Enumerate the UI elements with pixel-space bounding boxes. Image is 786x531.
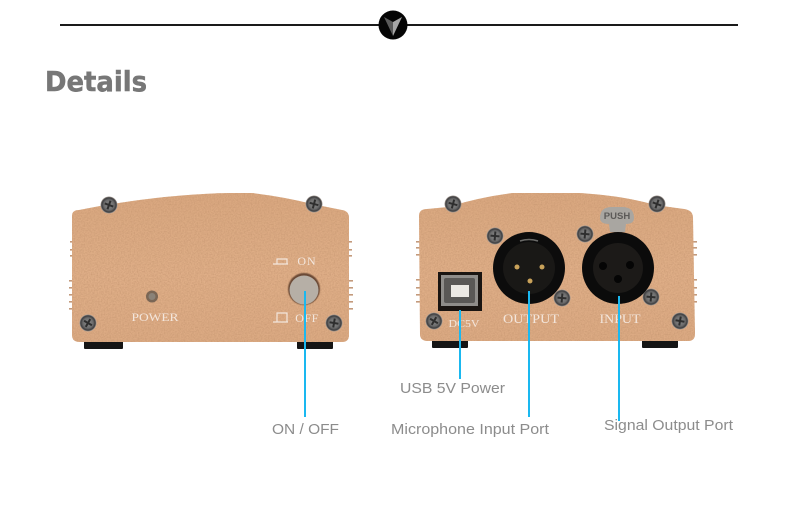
label: OUTPUT: OUTPUT (503, 311, 559, 326)
label: PUSH: PUSH (604, 211, 630, 222)
heading: Details: Details (45, 65, 147, 98)
label: INPUT: INPUT (600, 311, 641, 326)
panel: front of device (69, 193, 353, 349)
device body (419, 193, 695, 341)
device body (72, 193, 349, 342)
XLR input connector (582, 232, 654, 304)
label: ON: ON (297, 254, 317, 268)
USB port (438, 272, 482, 311)
power switch (288, 273, 320, 305)
device feet (84, 340, 333, 349)
cooling fins (69, 241, 353, 310)
screws (76, 194, 344, 335)
power LED (146, 290, 158, 302)
label: ON / OFF: ON / OFF (272, 421, 339, 438)
device feet (432, 339, 678, 348)
callout line: USB (459, 310, 461, 379)
icon: arrow badge (378, 10, 408, 40)
label: USB 5V Power: USB 5V Power (400, 380, 505, 397)
label: DC5V: DC5V (448, 318, 480, 330)
header divider line (60, 24, 738, 26)
PUSH latch (600, 207, 634, 232)
switch symbols (273, 259, 288, 322)
screws (422, 193, 690, 333)
callout line: signal port (618, 296, 620, 421)
callout line: microphone port (528, 291, 530, 417)
label: POWER: POWER (132, 310, 178, 324)
label: Signal Output Port: Signal Output Port (604, 417, 734, 434)
panel: back of device (416, 193, 697, 348)
XLR output connector (493, 232, 565, 304)
cooling fins (416, 241, 697, 303)
label: Microphone Input Port: Microphone Input Port (391, 421, 550, 438)
label: OFF: OFF (295, 311, 319, 325)
callout line: on/off (304, 291, 306, 417)
